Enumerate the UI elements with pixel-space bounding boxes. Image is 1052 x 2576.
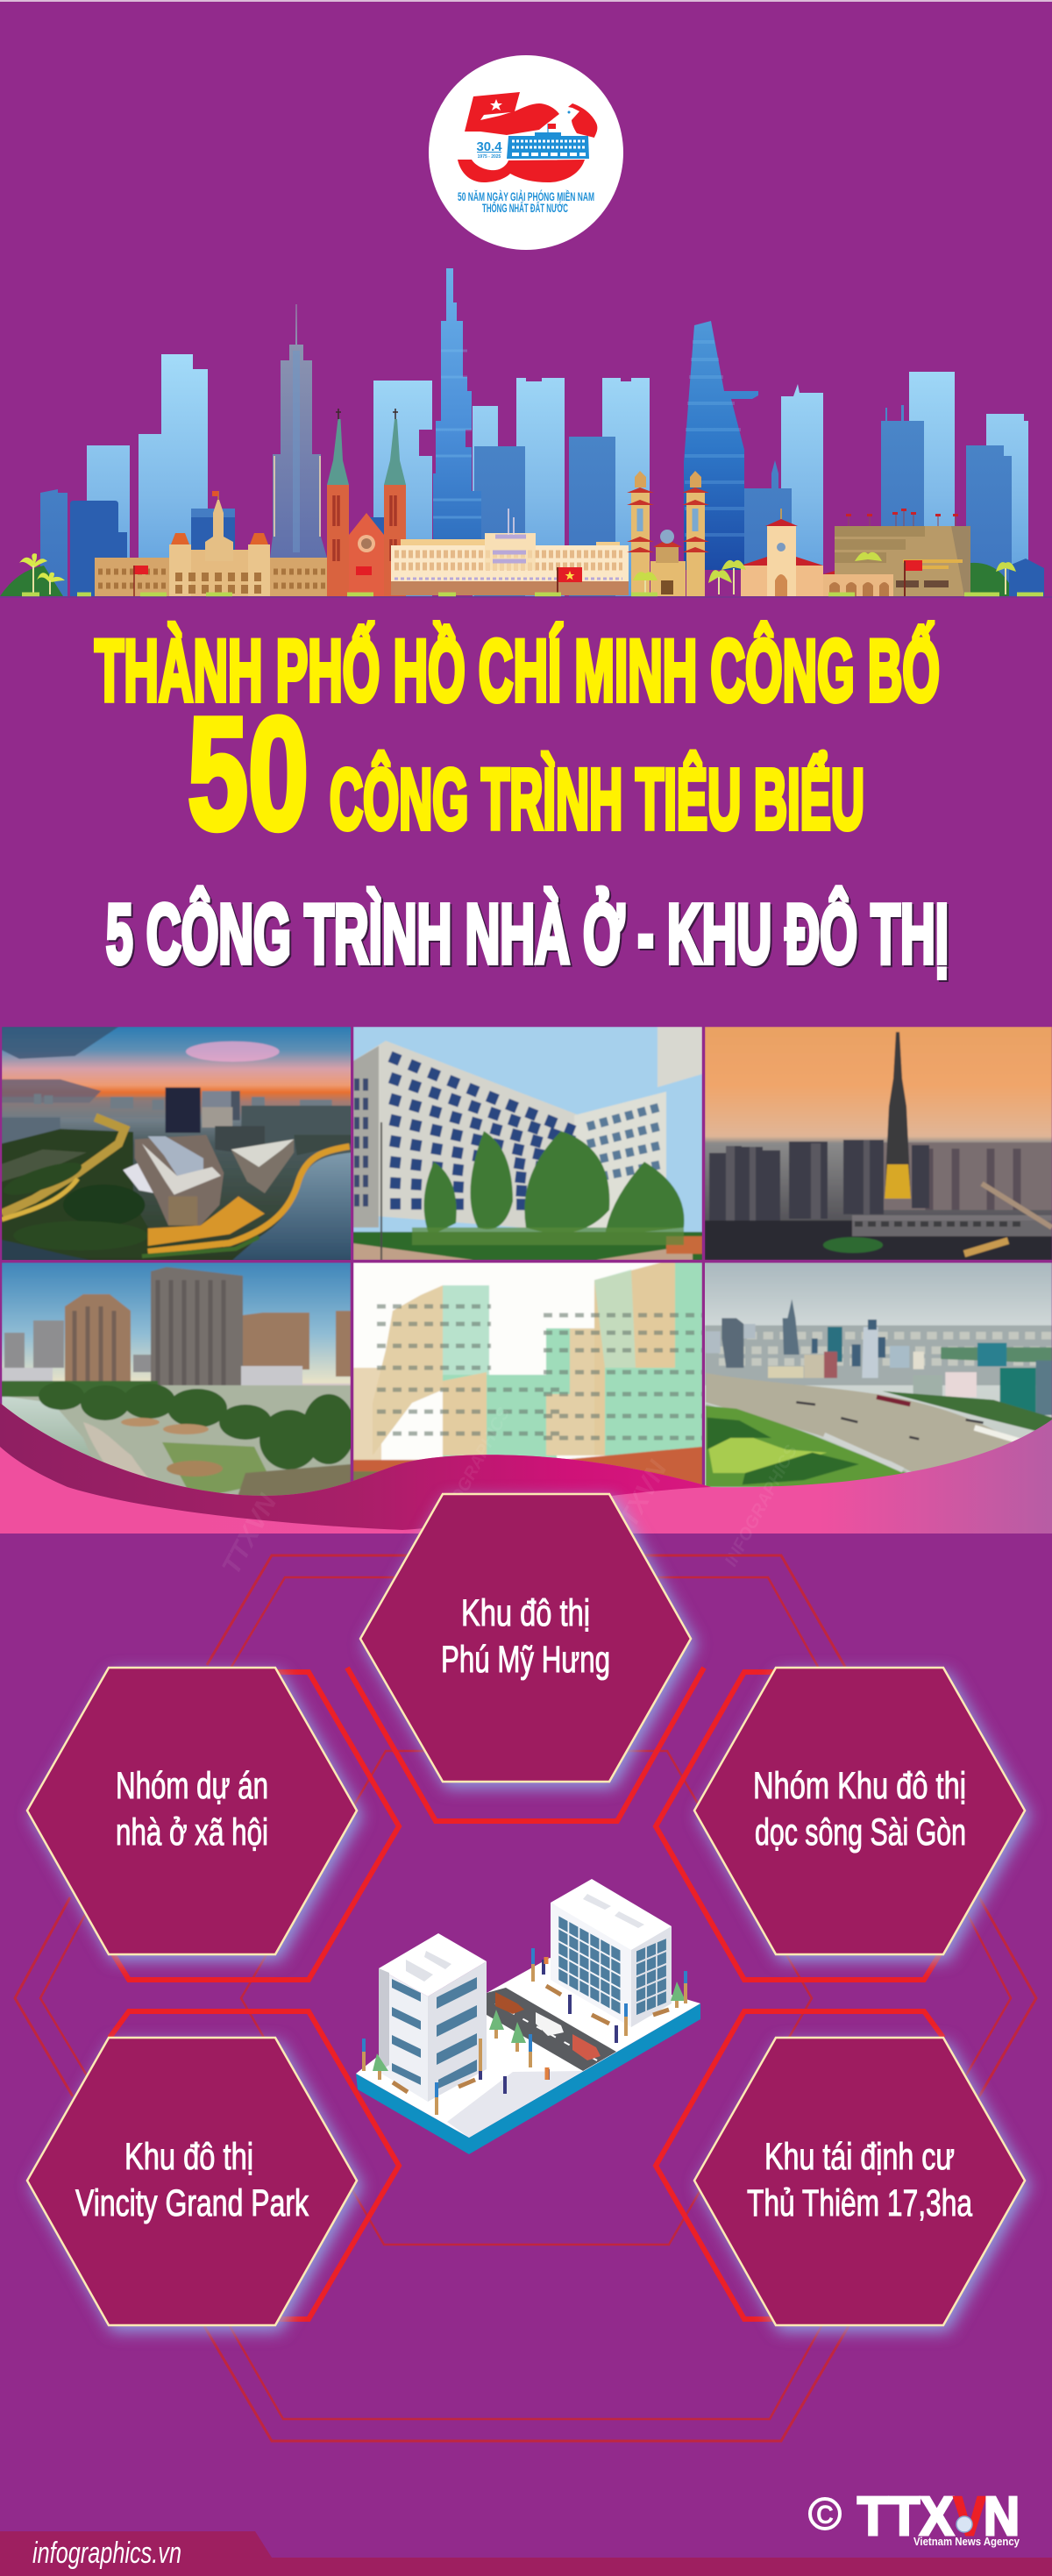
logo: 50 years emblem	[429, 55, 623, 250]
illustration: isometric street with two buildings	[356, 1879, 700, 2154]
bright red hexagon outlines	[110, 1668, 943, 2319]
footer: TTXVN logo	[857, 2487, 1020, 2548]
Independence Palace	[391, 509, 629, 596]
Landmark 81 tower	[433, 268, 481, 540]
hexagon: Nhóm Khu đô thị dọc sông Sài Gòn	[694, 1668, 1025, 1954]
vehicles and trees	[364, 1948, 686, 2115]
Cao Dai temple	[627, 471, 709, 596]
footer: copyright symbol	[810, 2499, 840, 2530]
photo: social housing block	[353, 1027, 702, 1260]
footer: copyright symbol: C	[816, 2501, 834, 2530]
hills and palm trees	[0, 552, 1052, 598]
title line 2: number 50: 50	[188, 684, 309, 863]
dark magenta swoosh	[0, 1403, 711, 1530]
faint watermarks: INFOGRAPHICS	[434, 1404, 515, 1532]
photo: Phu My Hung at dusk	[1, 1027, 352, 1261]
grey spire tower	[270, 304, 327, 558]
hexagon: Khu tái định cư Thủ Thiêm 17,3ha: Khu tái định cư	[764, 2136, 955, 2178]
photo: Landmark 81 skyline	[705, 1027, 1052, 1260]
hexagon: Khu đô thị Vincity Grand Park: Vincity Grand Park	[75, 2182, 309, 2224]
People's Committee hall	[95, 491, 344, 596]
faint watermarks: TTXVN	[217, 1489, 283, 1579]
hexagon: Nhóm dự án nhà ở xã hội: nhà ở xã hội	[116, 1811, 268, 1854]
left building	[379, 1933, 487, 2102]
Museum block	[835, 509, 970, 596]
faint watermarks: TTXVN	[607, 1455, 673, 1546]
hexagon: Khu đô thị Vincity Grand Park: Khu đô thị	[124, 2136, 253, 2178]
hexagon: Khu đô thị Phú Mỹ Hưng: Phú Mỹ Hưng	[441, 1639, 610, 1681]
illustration: Ho Chi Minh City skyline	[0, 268, 1052, 598]
hexagon: Khu tái định cư Thủ Thiêm 17,3ha	[694, 2038, 1025, 2325]
hexagon: Nhóm Khu đô thị dọc sông Sài Gòn: Nhóm Khu đô thị	[753, 1765, 966, 1807]
photo: Saigon riverside panorama	[701, 1263, 1052, 1497]
photo grid	[1, 1027, 1052, 1499]
photo: Vincity Grand Park	[2, 1263, 355, 1499]
footer: ribbon	[0, 2531, 1052, 2576]
hexagon: Nhóm dự án nhà ở xã hội	[27, 1668, 357, 1954]
footer: TTXVN logo: Vietnam News Agency	[913, 2535, 1020, 2548]
hexagon: Khu đô thị Vincity Grand Park	[27, 2038, 357, 2325]
photo: green and cream apartment towers	[353, 1263, 702, 1491]
light blue background towers	[87, 354, 1028, 596]
Notre Dame cathedral	[327, 409, 406, 596]
Ben Thanh market	[741, 509, 893, 596]
footer: TTXVN logo: V	[954, 2487, 985, 2547]
pink curved banner	[0, 1403, 1052, 1534]
hexagon: Khu đô thị Phú Mỹ Hưng: Khu đô thị	[461, 1592, 590, 1634]
footer: website: infographics.vn	[32, 2537, 181, 2570]
Bitexco financial tower	[684, 321, 758, 570]
faint watermarks: INFOGRAPHICS	[721, 1441, 802, 1569]
hexagon: Khu đô thị Phú Mỹ Hưng	[360, 1494, 691, 1782]
right building	[551, 1879, 672, 2027]
footer: TTXVN logo: N	[984, 2487, 1020, 2547]
logo: 50 years emblem: THỐNG NHẤT ĐẤT NƯỚC	[482, 202, 568, 215]
hexagon: Khu tái định cư Thủ Thiêm 17,3ha: Thủ Thiêm 17,3ha	[747, 2182, 972, 2224]
hexagon: Nhóm Khu đô thị dọc sông Sài Gòn: dọc sông Sài Gòn	[755, 1811, 966, 1854]
footer: TTXVN logo: TTX	[857, 2487, 954, 2547]
logo: 50 years emblem: 30.4	[477, 139, 502, 154]
faint watermarks	[217, 1404, 802, 1579]
darker blue mid towers	[40, 405, 1012, 596]
hexagon: Nhóm dự án nhà ở xã hội: Nhóm dự án	[116, 1765, 268, 1807]
decorative thin red hexagon lines	[15, 1555, 1036, 2441]
logo: 50 years emblem: 1975 - 2025	[478, 154, 501, 160]
logo: 50 years emblem: 50 NĂM NGÀY GIẢI PHÓNG MIỀN NAM	[458, 190, 594, 203]
